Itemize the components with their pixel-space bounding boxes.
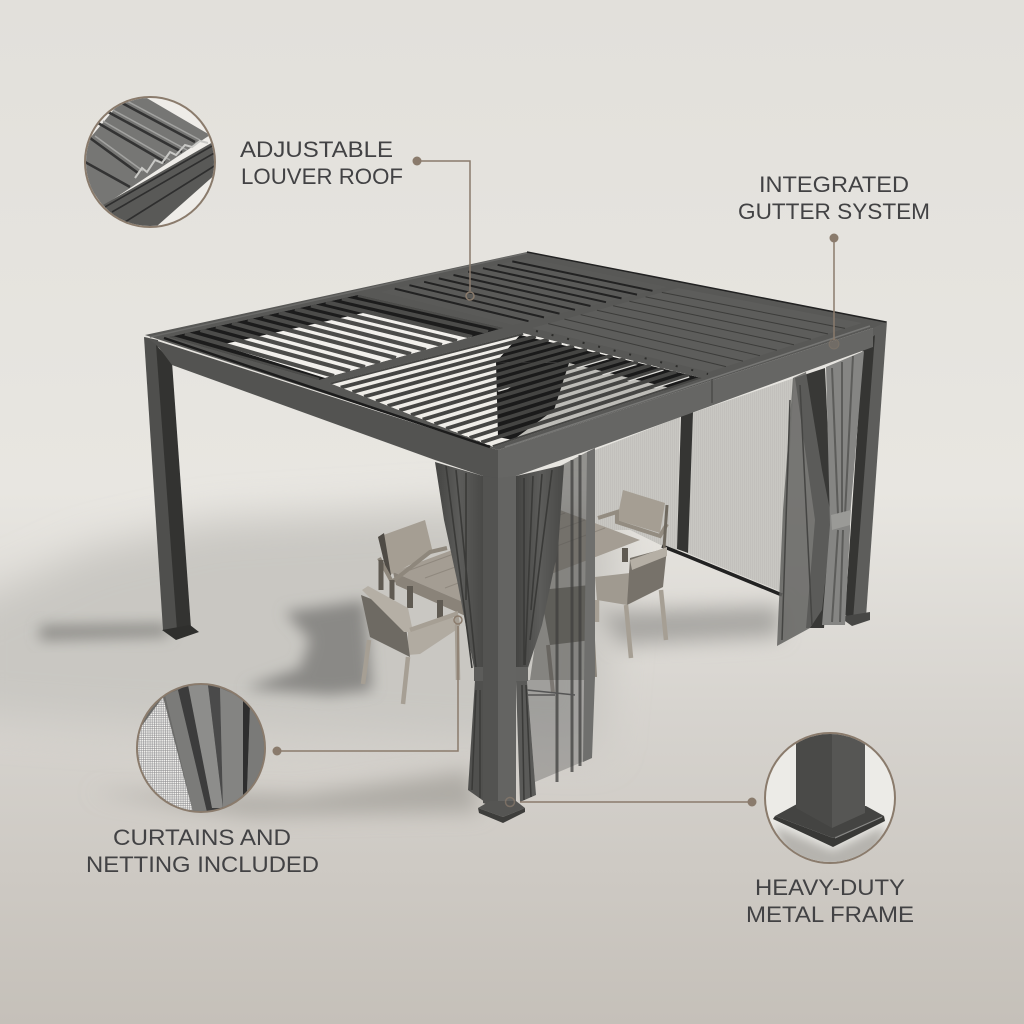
right post xyxy=(845,321,887,626)
left beam face xyxy=(145,337,498,478)
callout: integrated gutter system: INTEGRATED xyxy=(759,172,909,197)
callout: heavy-duty metal frame: METAL FRAME xyxy=(746,902,914,927)
label: CURTAINS AND xyxy=(113,825,291,850)
chair: front left xyxy=(361,586,458,704)
front netting xyxy=(527,448,595,782)
callout: integrated gutter system: GUTTER SYSTEM xyxy=(738,199,930,224)
callout: adjustable louver roof: LOUVER ROOF xyxy=(241,164,403,189)
leader xyxy=(506,798,756,806)
chair: back right xyxy=(598,490,667,548)
detail circle: post base xyxy=(765,725,895,870)
left post xyxy=(144,337,199,640)
front left curtain xyxy=(435,462,485,802)
front corner post xyxy=(478,455,525,823)
detail circle: louver xyxy=(80,97,218,230)
callout: curtains and netting xyxy=(86,616,462,877)
chair: back left xyxy=(378,520,447,600)
front right curtain xyxy=(516,465,564,802)
louver panel: left, open slats xyxy=(169,295,503,380)
detail circle: curtain xyxy=(130,684,268,812)
base plate xyxy=(845,612,870,626)
chair: seen through netting xyxy=(540,585,595,693)
louver panel: back, closed slats xyxy=(380,258,668,325)
base plate xyxy=(478,801,525,817)
chair: front right xyxy=(595,547,667,658)
right curtains and netting xyxy=(777,351,864,646)
callout: integrated gutter system xyxy=(738,172,930,349)
right beam face xyxy=(498,328,873,478)
leader xyxy=(412,156,474,300)
mesh back wall xyxy=(595,378,794,595)
floor rail xyxy=(662,546,782,595)
back post xyxy=(677,412,693,553)
louver panel: front, open slats xyxy=(329,333,702,447)
roof xyxy=(145,252,886,478)
callout: adjustable louver roof xyxy=(80,97,474,300)
roof top frame xyxy=(145,252,886,450)
label: HEAVY-DUTY xyxy=(755,875,905,900)
floor shadows xyxy=(0,508,780,816)
callout: curtains and netting: NETTING INCLUDED xyxy=(86,852,319,877)
leader xyxy=(829,234,839,349)
louver panel: right, closed flat xyxy=(532,288,862,374)
label: ADJUSTABLE xyxy=(240,137,393,162)
table xyxy=(393,510,640,618)
callout: heavy-duty metal frame xyxy=(506,725,914,927)
leader xyxy=(272,616,462,756)
base plate xyxy=(162,625,199,640)
